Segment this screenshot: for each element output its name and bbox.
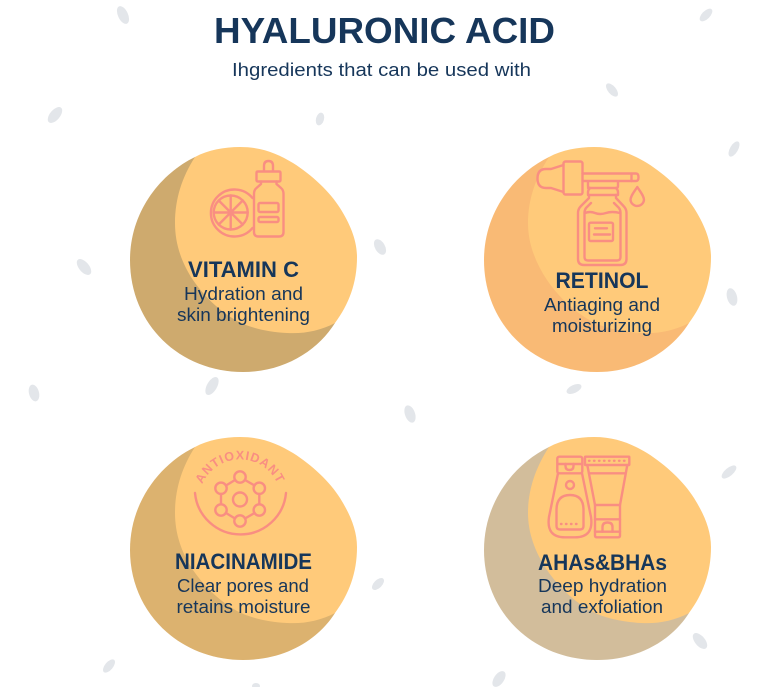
text: vitamin c benefit: [177, 284, 310, 325]
panel: vitamin c: [130, 147, 357, 372]
panel: ahas and bhas: [484, 437, 711, 660]
title: HYALURONIC ACID: [214, 10, 555, 51]
blob: ahas front: [528, 437, 711, 623]
blob: niacinamide shade: [130, 447, 335, 660]
icon: dropper bottle: [538, 162, 644, 265]
blob: niacinamide front: [175, 437, 357, 623]
heading: niacinamide: NIACINAMIDE: [175, 549, 312, 574]
heading: ahas and bhas: AHAs&BHAs: [538, 550, 667, 575]
text: niacinamide benefit: [176, 576, 310, 617]
blob: ahas shade: [484, 447, 689, 660]
heading: retinol: RETINOL: [556, 268, 648, 293]
text: ahas and bhas benefit: [538, 576, 667, 617]
text: vitamin c benefit: skin brightening: [177, 305, 310, 325]
blob: vitamin c front: [175, 147, 357, 333]
text: retinol benefit: Antiaging and: [544, 295, 660, 315]
text: niacinamide benefit: Clear pores and: [177, 576, 309, 596]
icon: orange and serum bottle: [211, 161, 284, 236]
blob: vitamin c shade: [130, 157, 335, 372]
blob: retinol front: [528, 147, 711, 333]
blob: retinol shade: [484, 157, 689, 372]
text: ahas and bhas benefit: and exfoliation: [541, 597, 663, 617]
panel: retinol: [484, 147, 711, 372]
text: retinol benefit: moisturizing: [552, 316, 652, 336]
heading: vitamin c: VITAMIN C: [188, 257, 299, 282]
text: antioxidant arc label: ANTIOXIDANT: [196, 450, 285, 484]
icon: bottle and tube: [549, 457, 629, 537]
subtitle: Ihgredients that can be used with: [232, 60, 531, 80]
text: retinol benefit: [544, 295, 660, 336]
text: vitamin c benefit: Hydration and: [184, 284, 303, 304]
panel: niacinamide: [130, 437, 357, 660]
text: niacinamide benefit: retains moisture: [176, 597, 310, 617]
icon: antioxidant molecule: [195, 459, 286, 534]
text: ahas and bhas benefit: Deep hydration: [538, 576, 667, 596]
